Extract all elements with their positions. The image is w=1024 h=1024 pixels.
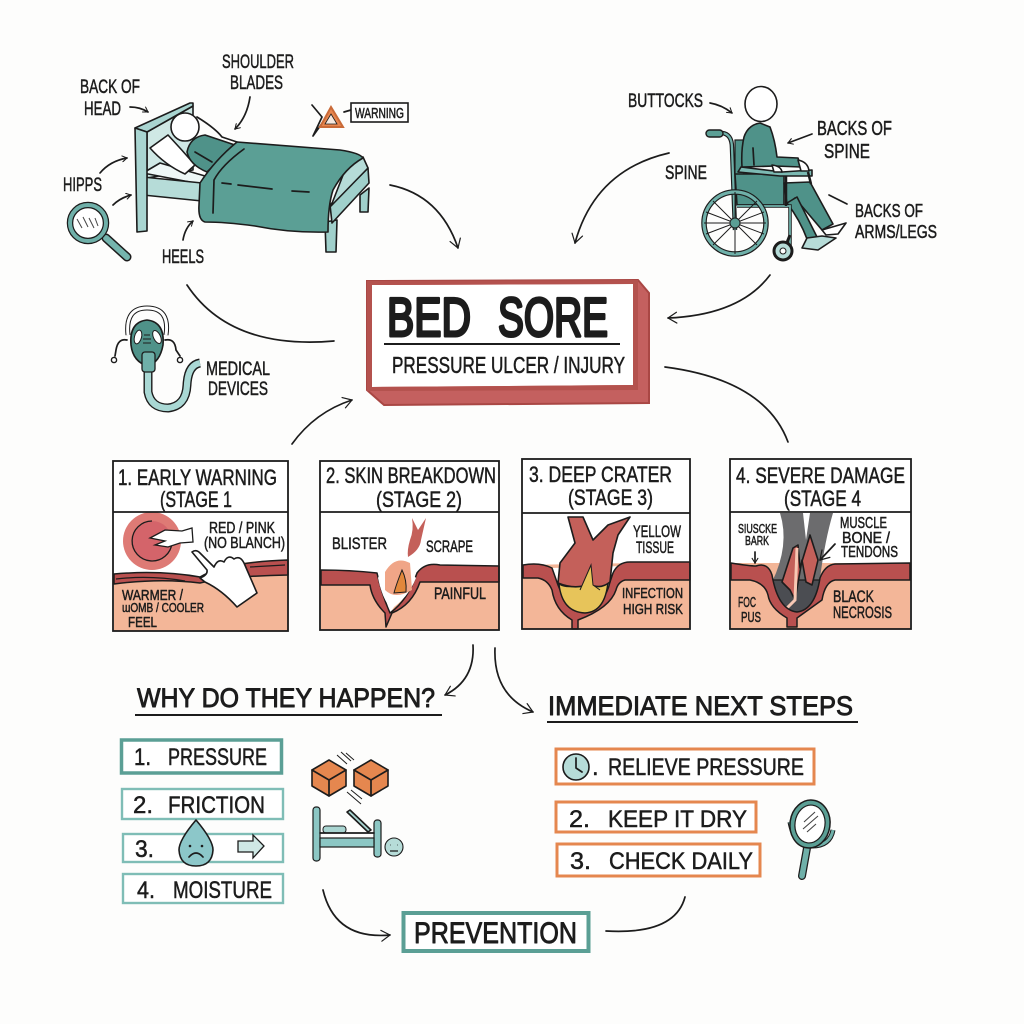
- label: heels: HEELS: [162, 247, 204, 268]
- panel: stage 3 deep crater: [522, 459, 690, 629]
- panel: stage 4 severe damage: 4. SEVERE DAMAGE: [736, 463, 905, 488]
- label: backs of spine: BACKS OF: [817, 118, 892, 140]
- icon: hand mirror: [787, 797, 833, 876]
- panel: stage 1 early warning: (NO BLANCH): [204, 535, 285, 552]
- label: back of head: HEAD: [84, 99, 121, 120]
- step 1: relieve pressure: .: [592, 754, 599, 781]
- step 2: keep it dry: [556, 802, 756, 833]
- icon: medical oxygen mask: [111, 308, 200, 408]
- panel: stage 2 skin breakdown: [320, 461, 499, 630]
- box: prevention: PREVENTION: [414, 917, 577, 950]
- panel: stage 4 severe damage: PUS: [741, 609, 761, 626]
- panel: stage 3 deep crater: HIGH RISK: [623, 601, 683, 618]
- heading: bed sore: [387, 286, 608, 348]
- panel: stage 4 severe damage: (STAGE 4: [784, 486, 861, 511]
- panel: stage 3 deep crater: YELLOW: [633, 522, 681, 541]
- panel: stage 2 skin breakdown: (STAGE 2): [376, 487, 462, 512]
- heading: bed sore: SORE: [498, 286, 608, 348]
- panel: stage 1 early warning: 1. EARLY WARNING: [118, 465, 277, 490]
- panel: stage 4 severe damage: FOC: [738, 594, 756, 611]
- cause 1: pressure: PRESSURE: [168, 744, 267, 771]
- label: medical devices: DEVICES: [208, 379, 268, 400]
- icon: pressing finger hand: [192, 551, 257, 607]
- step 3: check daily: CHECK DAILY: [609, 848, 753, 875]
- icon: warning sign: [312, 103, 408, 136]
- step 2: keep it dry: 2.: [569, 806, 590, 833]
- subtitle: pressure ulcer: PRESSURE ULCER / INJURY: [392, 352, 625, 378]
- label: medical devices: MEDICAL: [206, 359, 270, 380]
- panel: stage 2 skin breakdown: PAINFUL: [434, 584, 486, 603]
- step 2: keep it dry: KEEP IT DRY: [608, 806, 747, 833]
- label: heels: [162, 221, 204, 268]
- label: shoulder blades: BLADES: [230, 73, 283, 94]
- heading: immediate next steps: IMMEDIATE NEXT STEPS: [548, 691, 853, 721]
- cause 4: moisture: 4.: [137, 877, 155, 904]
- step 1: relieve pressure: [556, 749, 814, 784]
- label: backs of arms and legs: [829, 195, 937, 242]
- panel: stage 3 deep crater: 3. DEEP CRATER: [529, 462, 672, 487]
- label: backs of arms and legs: BACKS OF: [855, 201, 923, 221]
- label: shoulder blades: SHOULDER: [222, 52, 294, 73]
- cause 4: moisture: [123, 874, 283, 904]
- cause 4: moisture: MOISTURE: [173, 877, 272, 904]
- cause 2: friction: [122, 789, 283, 819]
- list: causes: [122, 740, 283, 904]
- cause 2: friction: FRICTION: [168, 792, 265, 819]
- label: hips: [63, 158, 131, 205]
- label: hips: HIPPS: [63, 175, 102, 196]
- label: backs of arms and legs: ARMS/LEGS: [855, 222, 937, 242]
- panel: stage 1 early warning: WARMER /: [122, 587, 184, 604]
- label: backs of spine: [788, 118, 892, 163]
- icon: pressure blocks on bed: [312, 752, 403, 861]
- panel: stage 2 skin breakdown: BLISTER: [332, 534, 387, 553]
- label: back of head: [80, 77, 148, 120]
- panel: stage 1 early warning: (STAGE 1: [160, 487, 232, 512]
- list: next steps: [556, 749, 814, 876]
- label: backs of spine: SPINE: [824, 141, 870, 163]
- heading: why do they happen: WHY DO THEY HAPPEN?: [137, 683, 435, 713]
- panel: stage 1 early warning: FEEL: [128, 614, 157, 631]
- step 3: check daily: [557, 844, 760, 876]
- panel: stage 4 severe damage: BARK: [745, 534, 769, 548]
- arrows: flow around the title: [187, 153, 788, 935]
- title panel: bed sore: [367, 280, 649, 405]
- panel: stage 1 early warning: RED / PINK: [209, 520, 276, 537]
- cause 1: pressure: [122, 740, 282, 773]
- panel: stage 4 severe damage: SIUSCKE: [738, 522, 777, 536]
- cause 3: sad water drop and arrow: [123, 820, 283, 866]
- label: shoulder blades: [222, 52, 294, 129]
- panel: stage 3 deep crater: (STAGE 3): [568, 485, 653, 510]
- panel: stage 2 skin breakdown: 2. SKIN BREAKDOWN: [326, 463, 496, 488]
- panel: stage 4 severe damage: MUSCLE: [840, 515, 887, 532]
- label: spine: SPINE: [665, 163, 707, 184]
- panel: stage 4 severe damage: TENDONS: [841, 544, 898, 561]
- icon: magnifying glass: [70, 205, 127, 257]
- illustration: patient lying in bed: [135, 103, 369, 252]
- panel: stage 4 severe damage: NECROSIS: [833, 603, 892, 622]
- label: medical devices: [206, 359, 270, 400]
- panel: stage 2 skin breakdown: SCRAPE: [426, 537, 473, 556]
- panel: stage 4 severe damage: [730, 459, 911, 629]
- label: back of head: BACK OF: [80, 77, 140, 98]
- step 1: relieve pressure: RELIEVE PRESSURE: [608, 754, 804, 781]
- cause 2: friction: 2.: [133, 792, 153, 819]
- illustration: person in wheelchair: [704, 86, 846, 260]
- panel: stage 4 severe damage: BONE /: [842, 530, 891, 547]
- panel: stage 1 early warning: ɯOMB / COOLER: [122, 600, 204, 615]
- panel: stage 3 deep crater: TISSUE: [636, 538, 674, 557]
- panel: stage 3 deep crater: INFECTION: [622, 585, 683, 602]
- label: buttocks: BUTTOCKS: [628, 91, 703, 112]
- step 3: check daily: 3.: [570, 848, 591, 875]
- icon: warning sign: WARNING: [355, 106, 404, 122]
- icon: red skin patch: [123, 512, 193, 570]
- panel: stage 4 severe damage: BLACK: [833, 587, 874, 606]
- heading: bed sore: BED: [387, 286, 471, 348]
- panel: stage 1 early warning: [113, 461, 288, 631]
- cause 3: sad water drop and arrow: 3.: [135, 836, 154, 863]
- cause 1: pressure: 1.: [134, 744, 151, 771]
